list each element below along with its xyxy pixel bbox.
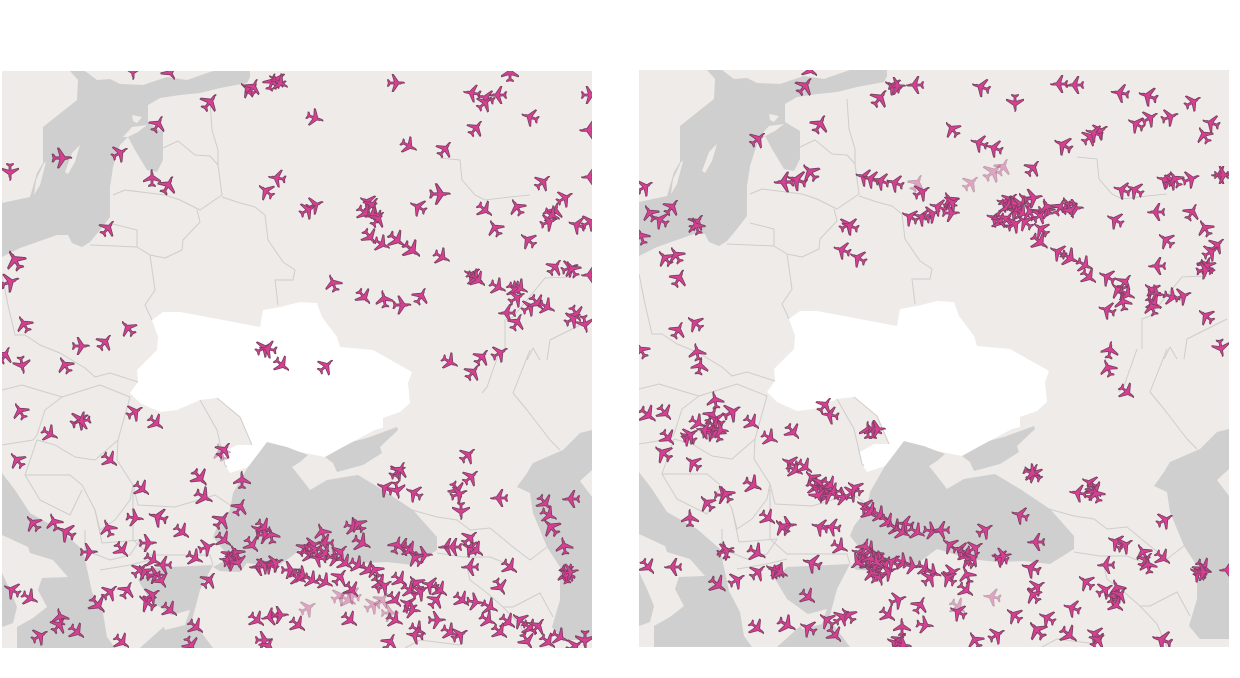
base map: land, seas and white Ukraine — [639, 70, 1229, 647]
panel: right map — [629, 58, 1237, 655]
planes: right map flights — [629, 58, 1237, 655]
planes: left map flights — [0, 60, 602, 658]
panel: left map — [0, 60, 602, 658]
base map: land, seas and white Ukraine — [2, 71, 592, 648]
